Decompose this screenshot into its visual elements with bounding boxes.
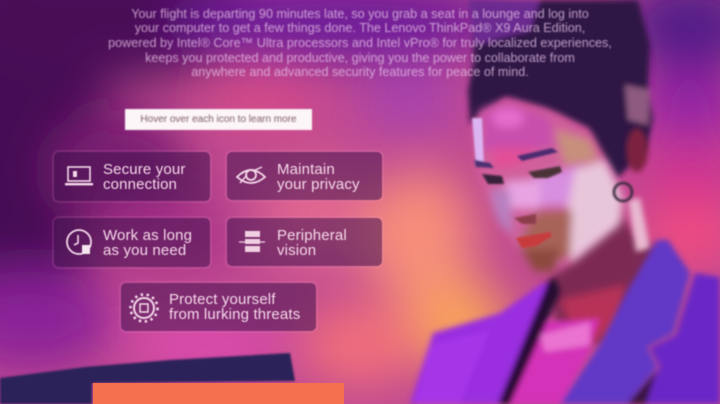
label: Maintain: [277, 161, 335, 178]
intro paragraph: keeps you protected and productive, giving you the power to collaborate from: [145, 51, 575, 65]
neck: [545, 215, 660, 345]
label: your privacy: [277, 176, 360, 193]
blazer and top: [410, 240, 720, 404]
portrait of woman: [410, 0, 720, 404]
label: [276, 227, 347, 259]
card: maintain privacy: [227, 152, 382, 200]
card: work as long: [54, 218, 210, 267]
label: [102, 161, 186, 193]
ear: [626, 128, 648, 172]
hair: [468, 0, 653, 178]
card: secure connection: [54, 152, 210, 201]
card: protect yourself: [121, 283, 316, 331]
intro paragraph: [108, 6, 612, 80]
label: connection: [103, 176, 177, 193]
laptop: [0, 353, 295, 404]
instruction button: Hover over each icon to learn more: [140, 114, 297, 125]
facial features: [474, 148, 632, 248]
intro paragraph: powered by Intel® Core™ Ultra processors and Intel vPro® for truly localized experiences,: [108, 36, 612, 50]
label: vision: [277, 242, 316, 259]
orange block: [93, 383, 344, 404]
intro paragraph: your computer to get a few things done. The Lenovo ThinkPad® X9 Aura Edition,: [135, 21, 585, 35]
icon: gear shield: [128, 292, 160, 324]
icon: eye: [235, 166, 267, 185]
label: [168, 291, 300, 323]
label: [276, 161, 360, 193]
icon: clock with battery: [65, 228, 93, 256]
instruction button: [125, 109, 312, 130]
card: peripheral vision: [227, 218, 382, 266]
icon: server stack: [238, 230, 266, 253]
left face rim light: [472, 118, 484, 165]
intro paragraph: anywhere and advanced security features for peace of mind.: [191, 65, 529, 79]
label: from lurking threats: [169, 306, 300, 323]
label: Peripheral: [277, 227, 347, 244]
intro paragraph: Your flight is departing 90 minutes late, so you grab a seat in a lounge and log into: [131, 6, 589, 20]
face: [474, 100, 625, 274]
icon: laptop: [64, 165, 94, 186]
label: Work as long: [103, 227, 192, 244]
label: [102, 227, 192, 259]
label: Protect yourself: [169, 291, 276, 308]
label: Secure your: [103, 161, 186, 178]
label: as you need: [103, 242, 186, 259]
